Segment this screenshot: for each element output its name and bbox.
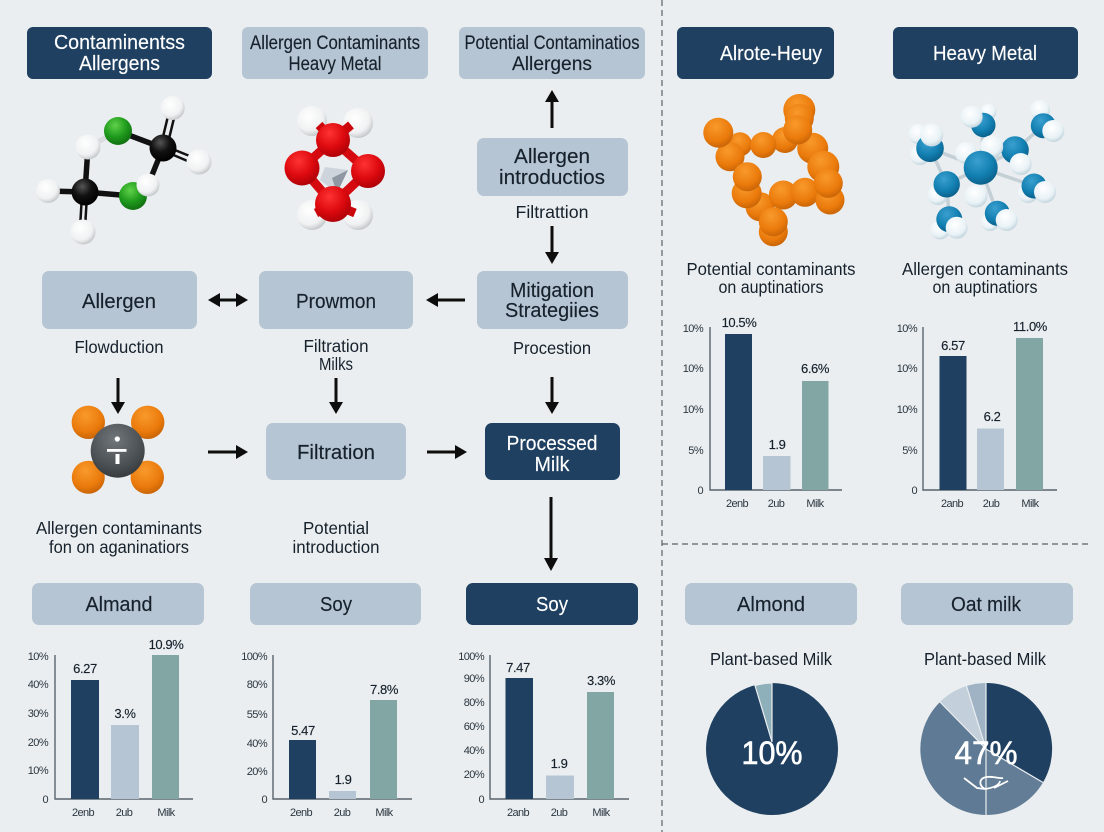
bar chart: top middle-right: 10% (683, 363, 704, 375)
bar chart: Soy: 40% (247, 738, 268, 750)
bar chart: Almand: Milk (157, 807, 176, 819)
dashed vertical divider (661, 0, 663, 832)
box: Prowmon (259, 271, 413, 329)
heading: Allergen Contaminants Heavy Metal: Heavy Metal (288, 54, 382, 75)
label: Potential introduction: Potential (303, 518, 369, 538)
bar chart: Almand: 2enb (72, 807, 95, 819)
bar chart: Soy: 80% (247, 679, 268, 691)
pie chart: Oat milk 47%: 47% (954, 735, 1018, 771)
bar chart: top right: 11.0% (1013, 319, 1048, 334)
arrow: right to Processed Milk (427, 445, 467, 459)
heading: Potential Contaminatios Allergens: Allergens (512, 54, 592, 75)
box: Processed Milk (485, 423, 620, 480)
tab: Almond (685, 583, 857, 625)
tab: Soy: Soy (320, 594, 352, 616)
bar chart: Soy dark: 7.47 (506, 660, 530, 675)
bar chart: Soy dark (458, 651, 629, 819)
label: Flowduction: Flowduction (74, 337, 164, 357)
tab: Almond: Almond (737, 594, 805, 616)
bar chart: Soy dark: 0 (478, 794, 484, 806)
arrow: long down to Soy (544, 497, 558, 571)
label: Allergen contaminants on auptinatiors: on auptinatiors (932, 277, 1038, 297)
label: Allergen contaminants: Allergen contaminants (36, 518, 202, 538)
bar chart: top middle-right: 10.5% (722, 315, 757, 330)
bar chart: Soy: 2ub (334, 807, 351, 819)
heading: Alrote-Heuy (677, 27, 834, 79)
bar chart: Soy: 2enb (290, 807, 313, 819)
bar chart: top right: 10% (897, 404, 918, 416)
bar chart: Soy: 20% (247, 766, 268, 778)
bar chart: top middle-right: Milk (806, 498, 825, 510)
bar chart: Soy (241, 651, 412, 819)
arrow: right to Filtration (208, 445, 248, 459)
icon: red white molecule (284, 106, 385, 230)
bar chart: Soy dark: Milk (592, 807, 611, 819)
pie chart: Oat milk 47% (920, 683, 1052, 815)
bar chart: Almand: 2ub (116, 807, 133, 819)
bar chart: top middle-right: 10% (683, 404, 704, 416)
label: Potential introduction (292, 518, 380, 557)
arrow: down to mitigation (545, 226, 559, 264)
label: Allergen contaminants on auptinatiors: Allergen contaminants (902, 259, 1068, 279)
arrow: down to molecule (111, 378, 125, 414)
bar chart: Soy dark: 80% (464, 697, 485, 709)
box: Allergen: Allergen (82, 291, 156, 313)
tab: Oat milk: Oat milk (951, 594, 1022, 616)
heading: Potential Contaminatios Allergens: Potential Contaminatios (464, 33, 640, 54)
bar chart: Almand: 10% (28, 765, 49, 777)
bar chart: top right: 6.2 (984, 409, 1001, 424)
bar chart: top right: 2ub (983, 498, 1000, 510)
bar chart: Soy dark: 60% (464, 721, 485, 733)
bar chart: top right: 2anb (941, 498, 964, 510)
bar chart: Almand: 40% (28, 679, 49, 691)
heading: Contaminants Allergens (27, 27, 212, 79)
box: Allergen introduction: Allergen (514, 146, 590, 168)
label: Potential introduction: introduction (292, 537, 380, 557)
tab: Soy dark (466, 583, 638, 625)
bar chart: Soy: 55% (247, 709, 268, 721)
label: Allergen contaminants (36, 518, 202, 557)
bar chart: top middle-right: 10% (683, 323, 704, 335)
box: Filtration (266, 423, 406, 480)
heading: Allergen Contaminants Heavy Metal: Allergen Contaminants (250, 33, 420, 54)
box: Filtration: Filtration (297, 442, 375, 464)
bar chart: Soy: 100% (241, 651, 268, 663)
bar chart: top middle-right: 2enb (726, 498, 749, 510)
box: Mitigation Strategies: Strategiies (505, 300, 599, 322)
dashed horizontal divider (662, 543, 1090, 545)
box: Mitigation Strategies: Mitigation (510, 280, 594, 302)
tab: Soy (250, 583, 421, 625)
icon: black green white molecule (36, 96, 212, 244)
bar chart: Almand (28, 637, 193, 819)
heading: Contaminants Allergens: Contaminentss (54, 32, 185, 54)
label: Filtration Milks: Filtration (304, 336, 368, 356)
heading: Contaminants Allergens: Allergens (79, 53, 160, 75)
heading: Heavy Metal: Heavy Metal (933, 43, 1037, 65)
label: Plant-based Milk left: Plant-based Milk (710, 649, 832, 669)
bar chart: Almand: 10.9% (149, 637, 184, 652)
bar chart: Soy dark: 90% (464, 673, 485, 685)
bar chart: top right: 10% (897, 363, 918, 375)
icon: orange grey molecule (72, 406, 164, 494)
bar chart: Almand: 3.% (114, 706, 136, 721)
bar chart: top middle-right: 1.9 (769, 437, 786, 452)
bar chart: top middle-right: 0 (697, 485, 703, 497)
icon: orange chain molecule (703, 94, 844, 246)
bar chart: Soy dark: 3.3% (587, 673, 616, 688)
label: Allergen contaminants: fon on aganinatiors (49, 537, 189, 557)
label: Plant-based Milk right: Plant-based Milk (924, 649, 1046, 669)
tab: Oat milk (901, 583, 1073, 625)
pie chart: Almond 10% (706, 683, 838, 815)
box: Prowmon: Prowmon (296, 291, 376, 313)
box: Mitigation Strategies (477, 271, 628, 329)
bar chart: top right: 6.57 (941, 338, 965, 353)
box: Allergen (42, 271, 197, 329)
arrow: left to Prowmon (426, 293, 465, 307)
label: Potential contaminants on auptinatiors (686, 259, 856, 297)
bar chart: Almand: 0 (42, 794, 48, 806)
bar chart: Soy: 0 (261, 794, 267, 806)
bar chart: top middle-right: 6.6% (801, 361, 830, 376)
box: Allergen introduction (477, 138, 628, 196)
bar chart: top right: 10% (897, 323, 918, 335)
tab: Soy dark: Soy (536, 594, 568, 616)
bar chart: Soy dark: 2anb (507, 807, 530, 819)
label: Potential contaminants on auptinatiors: on auptinatiors (718, 277, 824, 297)
tab: Almand: Almand (86, 594, 152, 616)
heading: Allergen Contaminants Heavy Metal (242, 27, 428, 79)
bar chart: Soy dark: 2ub (551, 807, 568, 819)
label: Filtration Milks (304, 336, 368, 374)
arrow: double headed (208, 293, 248, 307)
heading: Alrote-Heuy: Alrote-Heuy (720, 43, 822, 65)
label: Potential contaminants on auptinatiors: Potential contaminants (686, 259, 856, 279)
bar chart: Soy dark: 100% (458, 651, 485, 663)
bar chart: Soy: Milk (375, 807, 394, 819)
label: Filtration Milks: Milks (319, 354, 353, 374)
bar chart: top right: 5% (902, 445, 918, 457)
heading: Potential Contaminatios Allergens (459, 27, 645, 79)
label: Filtration: Filtrattion (516, 202, 588, 222)
box: Processed Milk: Milk (534, 454, 570, 476)
bar chart: Soy: 5.47 (291, 723, 315, 738)
bar chart: Soy dark: 40% (464, 745, 485, 757)
bar chart: top middle-right (683, 315, 842, 510)
tab: Almand (32, 583, 204, 625)
bar chart: top middle-right: 5% (688, 445, 704, 457)
pie chart: Almond 10%: 10% (742, 735, 802, 771)
bar chart: Soy: 7.8% (370, 682, 399, 697)
box: Processed Milk: Processed (506, 433, 598, 455)
bar chart: Almand: 20% (28, 737, 49, 749)
bar chart: top right (897, 319, 1057, 510)
arrow: down to Filtration (329, 378, 343, 414)
bar chart: Almand: 6.27 (73, 661, 97, 676)
heading: Heavy Metal (893, 27, 1078, 79)
bar chart: top right: 0 (911, 485, 917, 497)
icon: blue white molecule (908, 100, 1064, 240)
label: Procestion: Procestion (513, 338, 591, 358)
label: Allergen contaminants on auptinatiors (902, 259, 1068, 297)
bar chart: Almand: 10% (28, 651, 49, 663)
box: Allergen introduction: introductios (499, 167, 605, 189)
bar chart: Soy dark: 20% (464, 769, 485, 781)
arrow: up to heading (545, 90, 559, 128)
arrow: down to Processed Milk (545, 377, 559, 414)
bar chart: Almand: 30% (28, 708, 49, 720)
bar chart: Soy dark: 1.9 (551, 756, 568, 771)
bar chart: Soy: 1.9 (335, 772, 352, 787)
bar chart: top middle-right: 2ub (768, 498, 785, 510)
bar chart: top right: Milk (1021, 498, 1040, 510)
